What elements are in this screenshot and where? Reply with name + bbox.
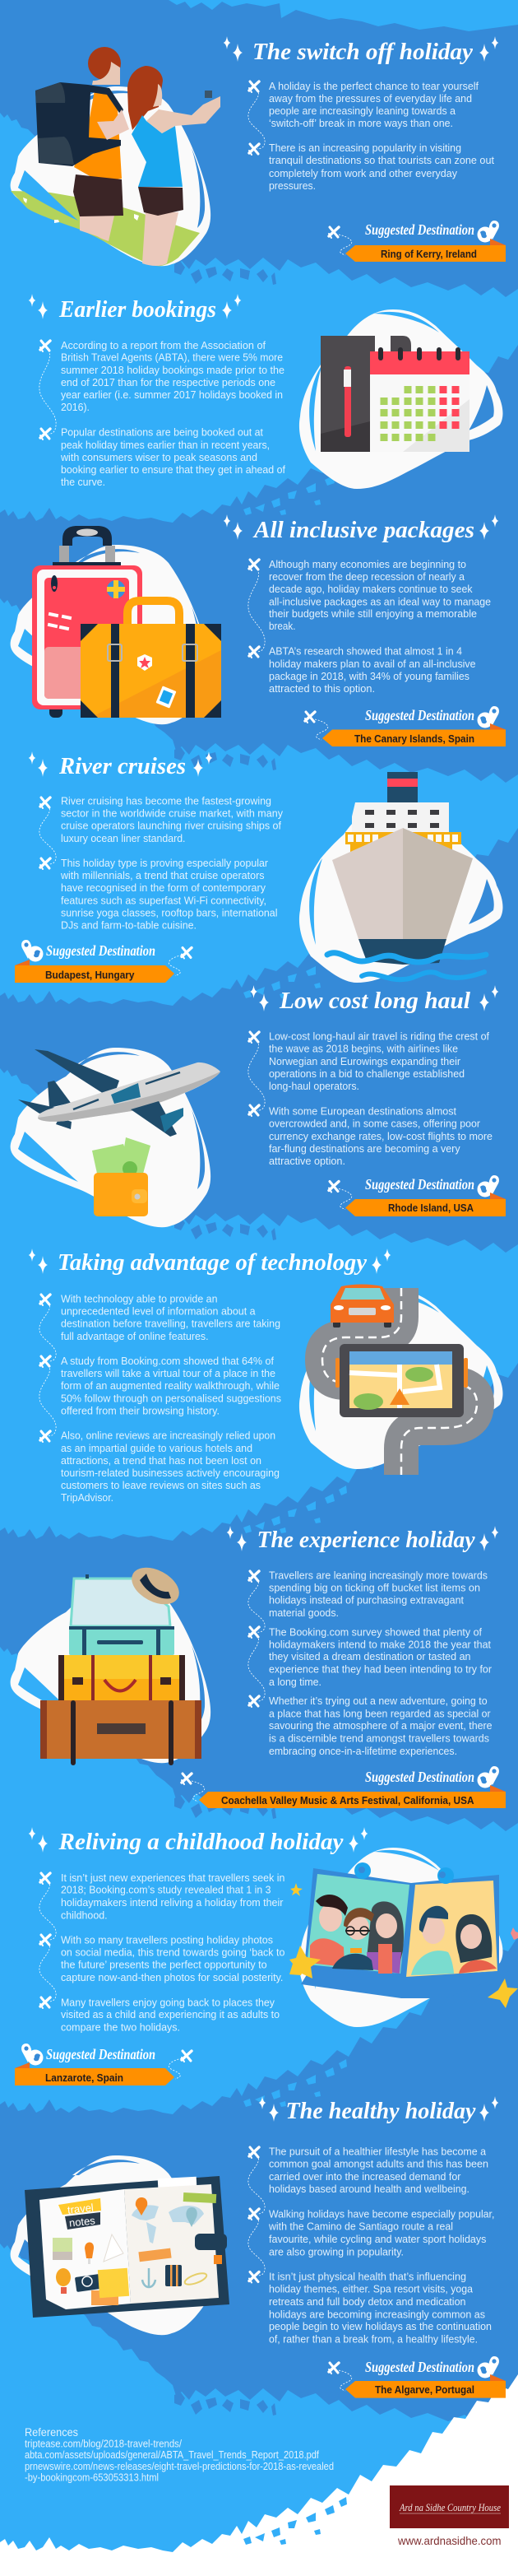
text block: break. <box>269 621 296 632</box>
text block: Whether it’s trying out a new adventure, going to <box>269 1695 488 1707</box>
text block: ABTA’s research showed that almost 1 in 4 <box>269 646 462 658</box>
panel: taking advantage of technology <box>29 1248 502 1504</box>
panel: all inclusive packages <box>11 514 506 746</box>
suggested destination callout: The Algarve, Portugal <box>375 2384 474 2396</box>
text block: is a discernible trend amongst travellers towards <box>269 1733 489 1745</box>
references: abta.com/assets/uploads/general/ABTA_Travel_Trends_Report_2018.pdf <box>25 2449 319 2461</box>
text block: overcrowded and, in some cases, offering poor <box>269 1118 481 1129</box>
text block: British Travel Agents (ABTA), there were 5% more <box>61 352 283 364</box>
suggested destination callout: Suggested Destination <box>365 2359 474 2375</box>
suggested destination callout <box>305 706 506 746</box>
suggested destination callout: Suggested Destination <box>46 942 155 959</box>
panel: the experience holiday <box>11 1526 506 1808</box>
text block: booking earlier to ensure that they get in ahead of <box>61 464 285 476</box>
suggested destination callout <box>15 2044 192 2085</box>
text block: on social media, this trend towards going ‘back to <box>61 1946 284 1958</box>
text block: compare the two holidays. <box>61 2021 180 2033</box>
suggested destination callout <box>15 940 192 983</box>
text block: as an impartial guide to various hotels and <box>61 1443 252 1454</box>
illustration: travel notes journal: notes <box>68 2214 96 2230</box>
text block: with millennials, a trend that cruise operators <box>60 870 265 881</box>
illustration: family photos and stars <box>289 1848 518 2027</box>
text block: holidaymakers intend reliving a holiday from their <box>61 1897 284 1909</box>
text block: sunrise yoga classes, rooftop bars, international <box>61 907 278 918</box>
illustration: calendar and planner <box>299 309 502 489</box>
title <box>29 751 212 779</box>
suggested destination callout: Suggested Destination <box>46 2046 155 2062</box>
panel: the healthy holiday <box>11 2096 506 2398</box>
text block: travellers will take a virtual tour of a place in the <box>61 1368 275 1379</box>
bullet markers <box>248 81 265 155</box>
text block: decade ago, holiday makers continue to seek <box>269 584 473 595</box>
text block: Travellers are leaning increasingly more towards <box>269 1570 488 1582</box>
text block: features such as superfast Wi-Fi connectivity, <box>61 895 266 906</box>
text block: attractive option. <box>269 1155 345 1167</box>
text block: holidays instead of purchasing extravagant <box>269 1595 464 1607</box>
text block: visited as a child and experiencing it as adults to <box>61 2009 280 2020</box>
text block: carried over into the increased demand for <box>269 2171 461 2183</box>
text block: end of 2017 than for the respective periods one <box>61 377 275 388</box>
suggested destination callout <box>329 221 506 262</box>
text block: holiday makers plan to avail of an all-inclusive <box>269 658 475 670</box>
text block: With so many travellers posting holiday photos <box>61 1935 273 1946</box>
bullet markers <box>248 2147 265 2283</box>
references: triptease.com/blog/2018-travel-trends/ <box>25 2438 182 2449</box>
text block: A study from Booking.com showed that 64% of <box>61 1355 274 1367</box>
suggested destination callout <box>329 1175 506 1216</box>
text block <box>60 795 284 932</box>
suggested destination callout: Ring of Kerry, Ireland <box>381 249 477 260</box>
panel: earlier bookings <box>29 294 502 489</box>
text block: sector in the worldwide cruise market, with many <box>61 807 284 819</box>
suggested destination callout: Rhode Island, USA <box>388 1202 474 1214</box>
text block: a long time. <box>269 1676 321 1688</box>
text block: Norwegian and Eurowings expanding their <box>269 1056 461 1067</box>
text block: people are increasingly leaning towards a <box>269 105 456 117</box>
title: The healthy holiday <box>286 2098 476 2124</box>
text block: Also, online reviews are increasingly relied upon <box>61 1430 275 1442</box>
panel: low cost long haul <box>11 985 506 1227</box>
text block <box>269 81 494 192</box>
illustration: cruise ship <box>299 772 502 983</box>
text block: tranquil destinations so that tourists can zone out <box>269 155 494 166</box>
bullet markers <box>39 1295 56 1442</box>
text block: peak holiday times earlier than in recent years, <box>61 439 270 451</box>
panel: reliving a childhood holiday <box>15 1827 518 2085</box>
text block: childhood. <box>61 1909 108 1921</box>
panel: the switch off holiday <box>11 36 506 266</box>
text block: year earlier (i.e. summer 2017 holidays booked in <box>61 389 283 401</box>
text block: According to a report from the Association of <box>61 340 266 351</box>
text block: With some European destinations almost <box>269 1105 456 1117</box>
text block: pressures. <box>269 180 316 192</box>
text block: material goods. <box>269 1607 339 1619</box>
text block: unprecedented level of information about a <box>61 1305 257 1317</box>
text block: It isn’t just new experiences that travellers seek in <box>61 1872 284 1884</box>
text block: capture now-and-then photos for social posterity. <box>61 1972 283 1983</box>
suggested destination callout <box>182 1766 506 1808</box>
references: prnewswire.com/news-releases/eight-travel-predictions-for-2018-as-revealed <box>25 2461 334 2472</box>
text block <box>269 559 491 695</box>
text block: 50% follow through on personalised suggestions <box>61 1393 281 1404</box>
text block: away from the pressures of everyday life and <box>269 93 472 105</box>
suggested destination callout: Coachella Valley Music & Arts Festival, California, USA <box>221 1795 474 1806</box>
text block: luxury ocean liner standard. <box>61 833 186 844</box>
panel: river cruises <box>15 751 502 983</box>
text block: spending big on ticking off bucket list items on <box>269 1582 480 1593</box>
text block: The pursuit of a healthier lifestyle has become a <box>269 2146 487 2158</box>
illustration: road, car and navigation tablet <box>299 1284 502 1475</box>
illustration: backpackers taking a photo <box>11 47 220 266</box>
text block <box>269 1570 493 1757</box>
text block: summer 2018 holiday bookings made prior to the <box>61 365 284 376</box>
text block: experience that they had been intending to try for <box>269 1664 493 1676</box>
text block: completely from work and other everyday <box>269 168 458 179</box>
logo: Ard na Sidhe Country House <box>390 2485 509 2528</box>
text block: with the Camino de Santiago route a real <box>268 2220 453 2232</box>
text block: holiday themes, either. Spa resort visits, yoga <box>269 2283 474 2295</box>
references: References <box>25 2425 78 2439</box>
text block: the future’ presents the perfect opportunity to <box>61 1960 267 1971</box>
text block: 2018; Booking.com’s study revealed that 1 in 3 <box>61 1885 271 1896</box>
text block: With technology able to provide an <box>61 1294 217 1305</box>
suggested destination callout: Budapest, Hungary <box>45 969 135 981</box>
suggested destination callout: Suggested Destination <box>365 707 474 723</box>
bullet markers <box>248 1032 265 1116</box>
text block: are also growing in popularity. <box>269 2246 404 2257</box>
text block: This holiday type is proving especially popular <box>61 858 269 869</box>
text block: cruise operators launching river cruising ships of <box>61 821 281 832</box>
suggested destination callout: Lanzarote, Spain <box>45 2072 123 2084</box>
text block: It isn’t just physical health that’s influencing <box>269 2271 466 2283</box>
text block: far-flung destinations are becoming a very <box>269 1143 460 1155</box>
text block: ‘switch-off’ break in more ways than one. <box>269 118 453 129</box>
text block: 2016). <box>61 402 90 413</box>
text block: they visited a dream destination or tasted an <box>269 1651 470 1662</box>
bullet markers <box>39 1873 56 2008</box>
title: Reliving a childhood holiday <box>58 1829 344 1855</box>
text block: people begin to view holidays as the continuation <box>269 2321 492 2332</box>
references <box>25 2425 334 2484</box>
text block: with consumers wiser to peak seasons and <box>60 452 257 463</box>
title: Low cost long haul <box>279 988 471 1014</box>
text block: long-haul operators. <box>269 1081 359 1092</box>
text block: form of an augmented reality walkthrough, while <box>61 1380 280 1392</box>
text block: full advantage of online features. <box>61 1331 209 1342</box>
title: Earlier bookings <box>58 296 216 323</box>
text block: holidaymakers intend to make 2018 the year that <box>269 1639 491 1650</box>
title: River cruises <box>58 753 186 779</box>
title: The switch off holiday <box>252 39 473 65</box>
text block <box>60 340 285 488</box>
suggested destination callout: The Canary Islands, Spain <box>354 733 474 745</box>
text block: Many travellers enjoy going back to places they <box>61 1997 275 2008</box>
text block: package in 2018, with 34% of young families <box>269 671 469 682</box>
text block: attractions, a trend that has not been lost on <box>61 1455 261 1467</box>
text block: DJs and farm-to-table cuisine. <box>61 920 197 932</box>
text block: embracing once-in-a-lifetime experiences. <box>269 1746 457 1757</box>
title: The experience holiday <box>257 1527 475 1553</box>
text block <box>61 1872 284 2033</box>
text block: operations in a bid to challenge established <box>269 1068 465 1080</box>
illustration: travel notes journal: travel <box>67 2202 95 2216</box>
text block: tourism-related businesses actively encouraging <box>61 1467 280 1479</box>
text block: Although many economies are beginning to <box>269 559 466 570</box>
illustration: stacked luggage and hat <box>11 1560 210 1765</box>
text block: currency exchange rates, low-cost flights to more <box>269 1131 493 1142</box>
text block: attracted to this option. <box>269 683 375 695</box>
text block: favourite, while cycling and water sport holidays <box>269 2234 486 2245</box>
text block: Popular destinations are being booked out at <box>61 427 263 439</box>
text block: the wave as 2018 begins, with airlines like <box>269 1044 458 1055</box>
bullet markers <box>248 560 265 658</box>
website address: www.ardnasidhe.com <box>397 2534 502 2547</box>
text block: Low-cost long-haul air travel is riding the crest of <box>269 1031 489 1043</box>
title: Taking advantage of technology <box>58 1249 367 1276</box>
bullet markers <box>39 341 56 439</box>
text block: River cruising has become the fastest-growing <box>61 795 271 807</box>
text block: of, rather than a break from, a healthy lifestyle. <box>269 2334 478 2346</box>
suggested destination callout: Suggested Destination <box>365 221 474 238</box>
text block: common goal amongst adults and this has been <box>269 2159 488 2170</box>
bullet markers <box>39 797 56 869</box>
text block: destination before travelling, travellers are taking <box>61 1318 280 1330</box>
text block: a place that has long been regarded as special or <box>269 1709 491 1720</box>
text block: have recognised in the form of contemporary <box>61 882 266 894</box>
text block: TripAdvisor. <box>61 1492 113 1504</box>
text block: A holiday is the perfect chance to tear yourself <box>269 81 479 92</box>
text block: There is an increasing popularity in visiting <box>269 142 461 154</box>
title: All inclusive packages <box>252 517 474 543</box>
text block: holidays are becoming increasingly common as <box>269 2309 485 2320</box>
illustration: suitcases <box>11 526 221 724</box>
text block: retreats and full body detox and medication <box>269 2296 465 2308</box>
text block <box>61 1294 281 1504</box>
text block <box>268 2146 494 2346</box>
illustration: travel notes journal <box>11 2155 229 2335</box>
text block: holidays based around health and wellbeing. <box>269 2183 469 2195</box>
text block: savouring the atmosphere of a major event, there <box>269 1720 493 1732</box>
text block: Walking holidays have become especially popular, <box>269 2209 494 2220</box>
text block: customers to leave reviews on sites such as <box>61 1480 261 1491</box>
text block: offered from their browsing history. <box>61 1405 220 1416</box>
suggested destination callout: Suggested Destination <box>365 1176 474 1193</box>
title <box>250 985 498 1014</box>
text block <box>269 1031 493 1167</box>
text block: recover from the deep recession of nearly a <box>269 571 465 583</box>
bullet markers <box>248 1571 265 1707</box>
text block: their budgets while still enjoying a memorable <box>269 608 477 620</box>
illustration: airplane and wallet <box>11 1048 220 1227</box>
suggested destination callout <box>329 2356 506 2398</box>
text block: the curve. <box>61 477 105 488</box>
text block: The Booking.com survey showed that plenty of <box>269 1626 482 1638</box>
suggested destination callout: Suggested Destination <box>365 1769 474 1785</box>
references: -by-bookingcom-653053313.html <box>25 2472 159 2484</box>
text block: all-inclusive packages as an ideal way to manage <box>269 596 491 607</box>
